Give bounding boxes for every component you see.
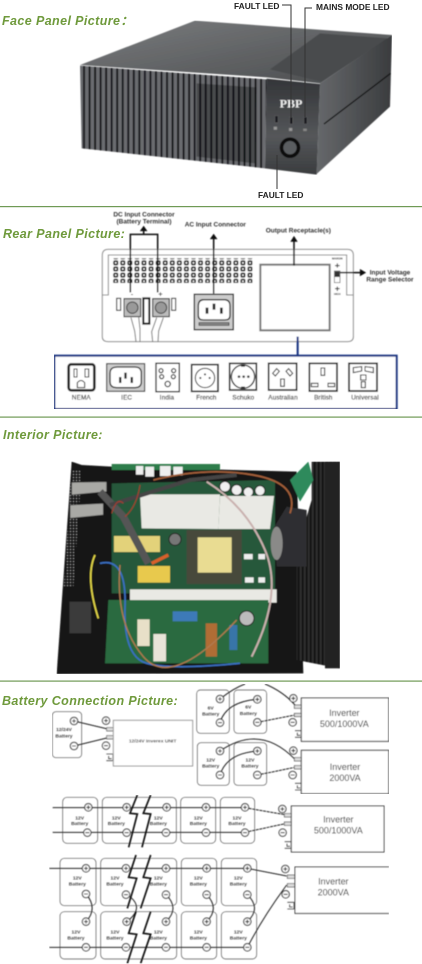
rear labels: Range Selector [366,277,414,284]
socket: Australian [268,363,298,401]
socket: French: French [196,394,217,401]
parallel bank diagram: Battery [108,821,125,827]
top strip board [112,464,220,470]
series parallel bank diagram: 12V [194,929,203,935]
LED callouts [234,1,390,200]
rear labels: DC Input Connector [113,211,175,218]
series parallel bank diagram: Battery [150,935,167,941]
heading: interior: Interior Picture: [3,428,103,442]
section: battery connection [2,684,389,963]
series parallel bank diagram: 2000VA [318,887,349,897]
device front panel [265,79,320,175]
ventilation holes [112,258,253,283]
parallel bank diagram: 12V [233,815,242,821]
parallel bank diagram: Battery [150,821,167,827]
transformer core [198,537,232,573]
12/24V unit diagram [52,712,193,766]
small green board [290,462,313,502]
socket: NEMA: NEMA [72,394,91,401]
series parallel bank diagram: Battery [69,882,86,888]
rear labels: Output Receptacle(s) [266,228,331,235]
parallel bank diagram: 12V [112,815,121,821]
large capacitor [169,533,181,545]
DC terminals: - [131,292,133,299]
12V pair diagram: 2000VA [329,773,361,783]
12V pair diagram: 12V [246,758,255,764]
power knob [280,137,300,158]
socket: NEMA [69,364,94,401]
socket types panel [54,337,397,409]
heat sinks [130,494,277,603]
socket: Universal [349,363,379,401]
terminal blocks [70,482,107,518]
chassis [57,462,303,674]
lower circuit board [105,600,268,663]
divider [0,206,422,207]
rear labels [113,211,414,284]
series parallel bank diagram: Battery [190,882,207,888]
rear labels: (Battery Terminal) [116,219,172,226]
section: rear panel [3,211,414,409]
voltage selector: HIGH [334,292,341,296]
6V batteries diagram: Battery [240,711,257,717]
socket: Universal: Universal [351,394,379,401]
series parallel bank diagram: Battery [106,882,124,888]
socket: Australian: Australian [268,394,298,401]
connectors [136,466,183,477]
12V pair diagram: Battery [202,764,219,770]
series parallel bank diagram: Battery [230,935,247,941]
heading: rear panel: Rear Panel Picture: [3,227,125,241]
series parallel bank diagram: 12V [154,876,163,882]
yellow components [114,536,170,583]
section: interior [3,428,340,674]
parallel bank diagram [53,795,384,852]
bottom diagrams [49,795,389,963]
wires [91,472,292,667]
divider [0,680,422,682]
socket: British: British [314,394,333,401]
right fins [297,462,340,668]
12/24V unit diagram: Battery [55,734,73,740]
parallel bank diagram: 12V [194,815,203,821]
upper circuit board [112,480,275,593]
series parallel bank diagram [49,855,389,963]
output capacitors [244,554,265,583]
device side face [317,35,392,174]
connector arrows [130,227,365,293]
socket: IEC [107,364,145,401]
device top vent [270,33,388,82]
fan [271,507,307,567]
rear labels: AC Input Connector [185,221,246,228]
parallel bank diagram: 500/1000VA [314,825,363,835]
voltage selector [332,257,343,296]
relay blocks [137,611,254,661]
series parallel bank diagram: Battery [230,882,247,888]
12V pair diagram: Battery [241,764,259,770]
socket: British [309,363,337,401]
series parallel bank diagram: 12V [72,929,81,935]
LED callouts: FAULT LED [234,1,279,11]
12V pair diagram: 12V [206,758,216,764]
device top face [80,21,392,83]
parallel bank diagram: Inverter [323,815,354,825]
interior photo [57,462,340,674]
DC terminals: + [158,290,162,299]
socket: IEC: IEC [121,394,132,401]
6V batteries diagram: 500/1000VA [320,719,369,729]
section: face panel [2,1,392,200]
series parallel bank diagram: 12V [111,876,120,882]
output receptacle [260,265,330,330]
6V batteries diagram: Battery [202,711,219,717]
rear panel outline [102,249,353,342]
series parallel bank diagram: Battery [106,935,124,941]
series parallel bank diagram: Battery [190,935,207,941]
series parallel bank diagram: 12V [73,876,82,882]
left perforation [64,470,82,587]
top diagrams [52,684,389,794]
transformer [187,530,242,584]
parallel bank diagram: Battery [190,821,207,827]
socket: French [192,365,218,401]
12V pair diagram [197,739,389,794]
LED indicators [274,116,307,131]
parallel bank diagram: 12V [75,815,85,821]
socket: India: India [160,394,175,401]
6V batteries diagram: 6V [245,704,252,710]
voltage selector: MARGIN [332,257,343,261]
12V pair diagram: Inverter [330,762,360,772]
socket: Schuko: Schuko [232,394,255,401]
series parallel bank diagram: 12V [154,929,163,935]
12/24V unit diagram: 12/24V Inverex UNIT [129,739,176,745]
black block [69,602,91,633]
device vent ribs [80,66,267,168]
6V batteries diagram: Inverter [329,708,360,718]
parallel bank diagram: 12V [154,815,163,821]
divider [0,416,422,418]
capacitors [220,481,265,497]
AC input connector [194,294,233,330]
rear labels: Input Voltage [370,269,411,276]
6V batteries diagram: 6V [208,705,214,711]
series parallel bank diagram: Battery [150,882,167,888]
heading: battery connection: Battery Connection Picture: [2,694,178,708]
series parallel bank diagram: 12V [194,876,203,882]
DC terminals [117,290,176,342]
heading: face panel: Face Panel Picture： [2,14,133,28]
parallel bank diagram: Battery [228,821,246,827]
series parallel bank diagram: 12V [234,876,243,882]
socket: India [156,363,179,401]
socket: Schuko [230,363,256,401]
logo: PBP [280,96,302,110]
series parallel bank diagram: 12V [111,929,120,935]
LED callouts: FAULT LED [258,190,303,200]
LED callouts: MAINS MODE LED [316,2,390,12]
series parallel bank diagram: 12V [234,929,243,935]
6V batteries diagram [197,684,389,741]
device photo [80,21,392,175]
12/24V unit diagram: 12/24V [56,727,73,733]
series parallel bank diagram: Battery [67,935,85,941]
parallel bank diagram: Battery [71,821,88,827]
series parallel bank diagram: Inverter [318,876,349,886]
